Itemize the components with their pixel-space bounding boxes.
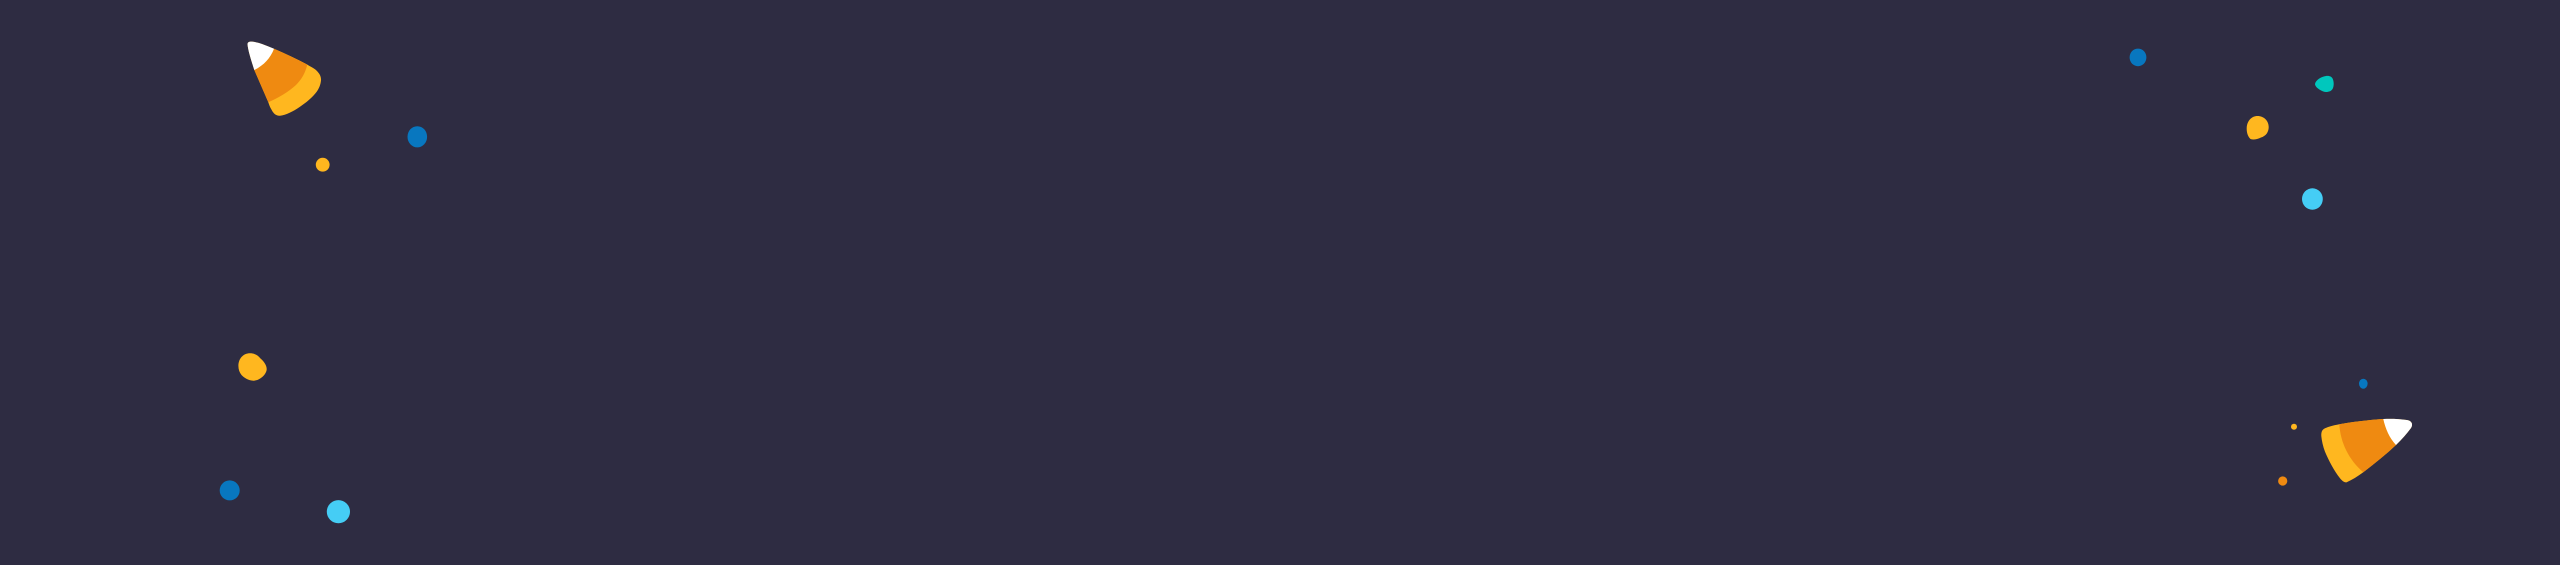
dot: blue above lower candy — [2359, 379, 2368, 389]
icon: candy corn top left — [248, 42, 321, 116]
dot: small yellow — [2291, 424, 2297, 430]
blob: yellow top right — [2247, 116, 2269, 140]
dot: orange — [2278, 476, 2287, 486]
dot: cyan bottom left — [327, 500, 350, 523]
dot: yellow top left — [316, 158, 330, 172]
dot: cyan right — [2302, 188, 2323, 210]
blob: yellow left — [238, 353, 267, 381]
dot: blue bottom left — [220, 480, 240, 500]
dot: blue top right — [2130, 49, 2146, 66]
dot: blue top left — [408, 126, 427, 147]
blob: teal top right — [2315, 76, 2334, 92]
icon: candy corn bottom right — [2321, 419, 2412, 482]
